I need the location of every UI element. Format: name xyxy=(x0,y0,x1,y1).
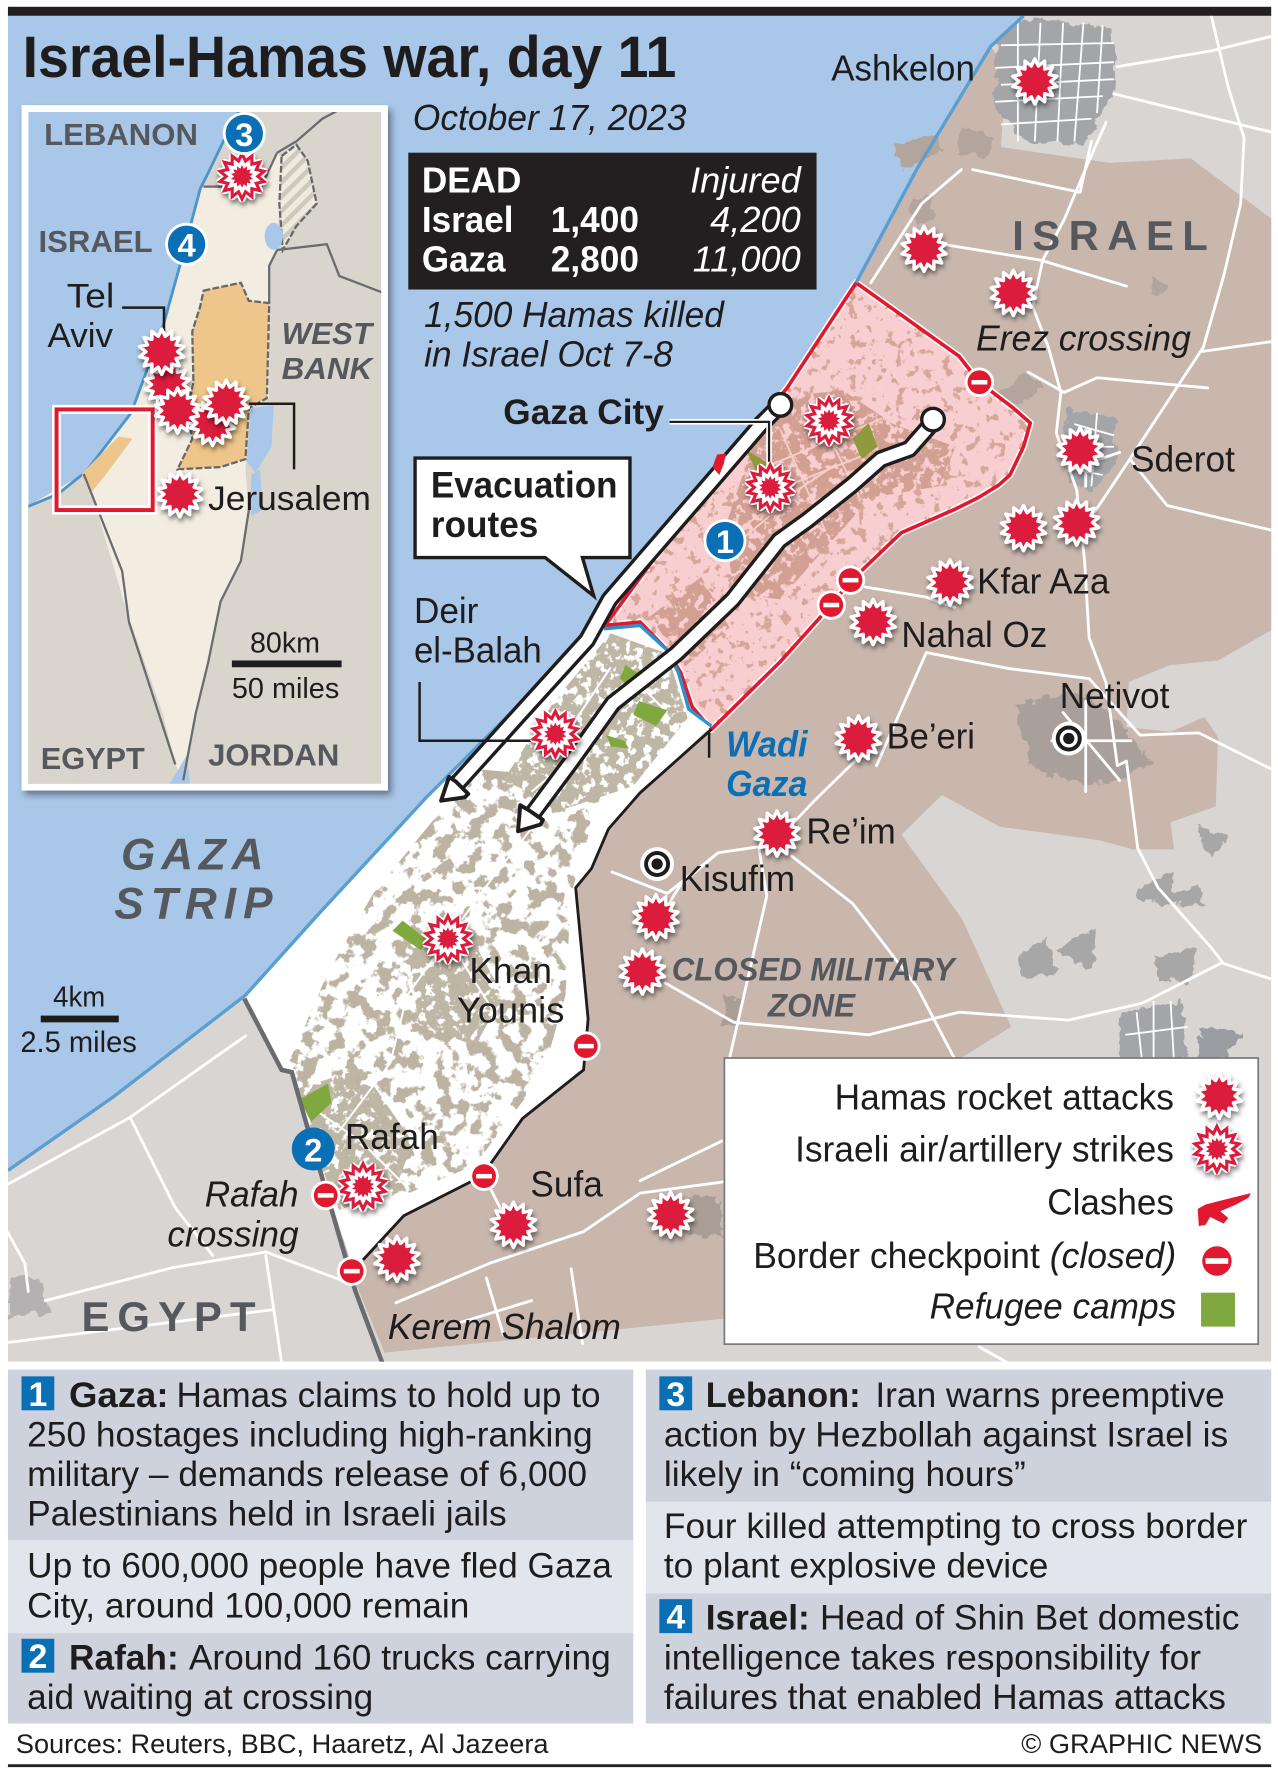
casualty table xyxy=(408,153,817,290)
Deir el-Balah leader xyxy=(420,682,541,741)
Netivot: Netivot xyxy=(1060,675,1169,716)
Rafah crossing: crossing xyxy=(167,1213,299,1254)
Israel text: failures that enabled Hamas attacks xyxy=(664,1677,1226,1717)
legend: rocket attacks: Hamas rocket attacks xyxy=(835,1076,1174,1117)
inset strike marker xyxy=(220,154,264,199)
Gaza City: Gaza City xyxy=(503,393,664,432)
marker 1: 1 xyxy=(716,523,734,560)
inset Gaza xyxy=(81,437,132,492)
rocket attack markers xyxy=(375,59,1102,1281)
number badge 1: 1 xyxy=(28,1376,47,1414)
Hamas killed note: in Israel Oct 7-8 xyxy=(424,333,673,374)
inset Gulf of Aqaba xyxy=(170,755,190,784)
southern zone fill xyxy=(244,624,711,1276)
town street grids xyxy=(995,23,1188,1063)
wadi Gaza river line xyxy=(604,625,711,726)
northern sparse speckle xyxy=(599,283,1035,735)
inset leader lines xyxy=(122,308,294,469)
air and artillery strike markers xyxy=(341,398,851,1209)
number badge 2 xyxy=(22,1638,54,1676)
Gaza Strip label: GAZA xyxy=(121,831,264,880)
Deir el-Balah: el-Balah xyxy=(414,630,542,671)
number badge 3 xyxy=(659,1376,692,1414)
Israel text xyxy=(664,1598,1240,1717)
number badge 3: 3 xyxy=(666,1376,685,1414)
Rafah text: aid waiting at crossing xyxy=(27,1677,373,1717)
inset lower-left land fix xyxy=(25,474,175,786)
inset labels: 50 miles xyxy=(232,672,339,704)
callout: evacuation routes: Evacuation xyxy=(431,464,618,506)
inset labels: EGYPT xyxy=(41,742,145,776)
northern border xyxy=(605,283,1030,729)
inset labels: WEST xyxy=(282,317,375,351)
marker 4: 4 xyxy=(178,227,197,264)
casualty table: DEAD xyxy=(422,159,521,200)
inset frame xyxy=(22,105,388,791)
bottom text panels xyxy=(8,1370,1271,1724)
coastline north xyxy=(856,16,1024,283)
Erez crossing: Erez crossing xyxy=(976,318,1191,359)
Closed military zone label xyxy=(672,951,958,1024)
marker 3 xyxy=(223,112,266,155)
panel 2: Rafah xyxy=(8,1633,633,1724)
refugee camps south xyxy=(300,665,667,1122)
legend: clashes: Clashes xyxy=(1047,1182,1174,1223)
Gaza text: Hamas claims to hold up to xyxy=(176,1375,601,1415)
Israel text: intelligence takes responsibility for xyxy=(664,1637,1201,1677)
inset Dead Sea xyxy=(247,405,274,516)
marker 4 xyxy=(165,223,208,266)
closed checkpoints xyxy=(311,368,994,1286)
callout: evacuation routes: routes xyxy=(431,503,538,545)
Kerem Shalom: Kerem Shalom xyxy=(388,1306,621,1347)
Egypt border xyxy=(244,999,382,1363)
inset Sea of Galilee xyxy=(265,223,283,250)
closed military zone area xyxy=(339,46,1276,1353)
Rafah crossing: Rafah xyxy=(205,1174,299,1215)
marker 3: 3 xyxy=(235,116,253,153)
Lebanon text: action by Hezbollah against Israel is xyxy=(664,1414,1228,1454)
callout: evacuation routes xyxy=(415,458,630,596)
inset rocket markers xyxy=(140,329,248,517)
inset Israel xyxy=(25,153,282,780)
northern city street grid xyxy=(741,418,882,537)
Gaza south xyxy=(244,624,711,1363)
Sufa: Sufa xyxy=(530,1164,604,1205)
Closed military zone label: CLOSED MILITARY xyxy=(672,951,958,988)
Hamas killed note: 1,500 Hamas killed xyxy=(424,294,726,335)
Gaza text xyxy=(27,1375,601,1534)
number badge 4: 4 xyxy=(666,1599,685,1637)
road network xyxy=(8,16,1272,1363)
casualty table: 1,400 xyxy=(551,199,639,240)
legend: checkpoint: Border checkpoint (closed) xyxy=(753,1235,1176,1276)
marker 2: 2 xyxy=(304,1131,322,1168)
Wadi Gaza label: Gaza xyxy=(726,763,808,804)
inset focus rectangle xyxy=(57,409,153,510)
legend: clashes xyxy=(1047,1182,1251,1226)
Closed military zone label: ZONE xyxy=(767,987,856,1024)
Israel text: Israel: xyxy=(706,1598,810,1638)
Rafah crossing xyxy=(167,1174,299,1254)
land background xyxy=(8,16,1271,1362)
inset scale bar xyxy=(232,660,342,667)
northern zone fill xyxy=(605,283,1030,729)
number badge 4 xyxy=(659,1599,692,1637)
clash marker off coast xyxy=(713,454,726,475)
panel: people fled xyxy=(8,1540,633,1633)
Re'im: Re’im xyxy=(806,811,896,852)
southern built-up speckle xyxy=(288,769,605,1199)
inset labels: JORDAN xyxy=(208,739,339,773)
Sderot: Sderot xyxy=(1131,439,1235,480)
country label Egypt: EGYPT xyxy=(81,1293,256,1340)
inset labels: LEBANON xyxy=(44,118,198,152)
casualty table: Gaza xyxy=(422,238,506,279)
panel: people fled: Up to 600,000 people have fled Gaza xyxy=(27,1546,612,1586)
inset coastline xyxy=(25,107,241,508)
map panel xyxy=(8,16,1276,1363)
Rafah text: Around 160 trucks carrying xyxy=(189,1637,611,1677)
evacuation route 2 xyxy=(518,408,944,831)
Khan Younis: Younis xyxy=(457,989,564,1030)
Lebanon text: Lebanon: xyxy=(706,1375,861,1415)
panel 3: Lebanon xyxy=(646,1370,1271,1502)
panel: border killed: to plant explosive device xyxy=(664,1546,1048,1586)
evacuation route 1 xyxy=(441,394,792,801)
Khan Younis: Khan xyxy=(469,950,552,991)
panel 4: Israel xyxy=(646,1594,1271,1724)
towns and built-up patches xyxy=(8,18,1244,1318)
credit: © GRAPHIC NEWS xyxy=(1021,1728,1262,1759)
inset labels: 80km xyxy=(250,627,320,659)
casualty table: 2,800 xyxy=(551,238,639,279)
title: Israel-Hamas war, day 11 xyxy=(23,25,676,90)
bottom rule xyxy=(8,1764,1271,1767)
Kisufim: Kisufim xyxy=(680,858,795,899)
Wadi Gaza leader xyxy=(708,733,710,758)
dense built-up areas xyxy=(288,633,688,1210)
inset labels: Jerusalem xyxy=(208,480,371,518)
legend: refugee camps: Refugee camps xyxy=(930,1286,1176,1327)
inset labels: ISRAEL xyxy=(38,225,153,259)
casualty table: 11,000 xyxy=(693,238,801,279)
map labels xyxy=(81,47,1235,1347)
casualty table: Injured xyxy=(690,159,803,200)
map scale xyxy=(20,981,137,1059)
inset neighbouring land xyxy=(25,107,385,786)
Gaza text: military – demands release of 6,000 xyxy=(27,1454,587,1494)
inset Golan hatching xyxy=(279,145,317,250)
Gaza text: Palestinians held in Israeli jails xyxy=(27,1494,507,1534)
Israel text: Head of Shin Bet domestic xyxy=(820,1598,1240,1638)
Gaza text: 250 hostages including high-ranking xyxy=(27,1414,593,1454)
Rafah: Rafah xyxy=(345,1116,439,1157)
locator inset map xyxy=(22,105,388,791)
Rafah text xyxy=(27,1637,611,1717)
sources: Sources: Reuters, BBC, Haaretz, Al Jazeera xyxy=(16,1728,549,1759)
Rafah text: Rafah: xyxy=(69,1637,179,1677)
Wadi Gaza label xyxy=(726,724,808,804)
southern road lines xyxy=(288,667,667,1187)
top rule xyxy=(8,7,1271,16)
coastline xyxy=(8,624,605,1171)
date: October 17, 2023 xyxy=(413,97,686,138)
number badge 2: 2 xyxy=(28,1638,47,1676)
Nahal Oz: Nahal Oz xyxy=(901,614,1047,655)
northern urban core xyxy=(650,390,956,667)
casualty table: Israel xyxy=(422,199,513,240)
Be'eri: Be’eri xyxy=(887,716,975,757)
casualty table: 4,200 xyxy=(710,199,801,240)
inset labels: Aviv xyxy=(48,317,113,355)
inset labels xyxy=(38,118,375,776)
Gaza Strip label: STRIP xyxy=(114,879,273,928)
Lebanon text xyxy=(664,1375,1228,1494)
place name: Ashkelon xyxy=(831,47,975,88)
inset labels: Tel xyxy=(67,278,114,316)
Lebanon text: likely in “coming hours” xyxy=(664,1454,1026,1494)
Gaza east border xyxy=(363,729,711,1260)
map scale: 4km xyxy=(53,981,105,1013)
panel: border killed: Four killed attempting to cross border xyxy=(664,1506,1248,1546)
Gaza City leader line xyxy=(670,422,769,469)
Lebanon text: Iran warns preemptive xyxy=(875,1375,1225,1415)
refugee camp Gaza City xyxy=(746,423,878,475)
inset borders xyxy=(84,110,383,780)
marker 2 xyxy=(292,1128,335,1171)
sea xyxy=(8,16,1271,1362)
number badge 1 xyxy=(22,1376,54,1414)
marker 1 xyxy=(703,519,746,562)
Deir el-Balah xyxy=(414,590,542,671)
map scale: 2.5 miles xyxy=(20,1026,137,1059)
Gaza north, evacuation zone xyxy=(599,283,1035,735)
Kfar Aza: Kfar Aza xyxy=(977,561,1110,602)
inset sea xyxy=(28,112,381,784)
town bullseye Kisufim xyxy=(640,847,674,881)
Gaza City leader line inner xyxy=(670,420,770,462)
panel 1: Gaza xyxy=(8,1370,633,1540)
panel: people fled: City, around 100,000 remain xyxy=(27,1585,469,1625)
Gaza Strip label xyxy=(114,831,273,928)
panel: border killed xyxy=(646,1502,1271,1594)
Gaza text: Gaza: xyxy=(69,1375,169,1415)
legend: strikes: Israeli air/artillery strikes xyxy=(795,1128,1174,1169)
Deir el-Balah: Deir xyxy=(414,590,478,631)
town bullseye Netivot xyxy=(1052,722,1086,755)
Khan Younis xyxy=(457,950,564,1030)
inset focus rectangle red xyxy=(57,409,153,510)
inset labels: BANK xyxy=(282,352,374,386)
inset West Bank xyxy=(178,283,269,469)
Hamas killed note xyxy=(424,294,726,374)
Wadi Gaza label: Wadi xyxy=(726,724,808,765)
legend xyxy=(724,1058,1258,1344)
country label Israel: ISRAEL xyxy=(1012,212,1208,259)
